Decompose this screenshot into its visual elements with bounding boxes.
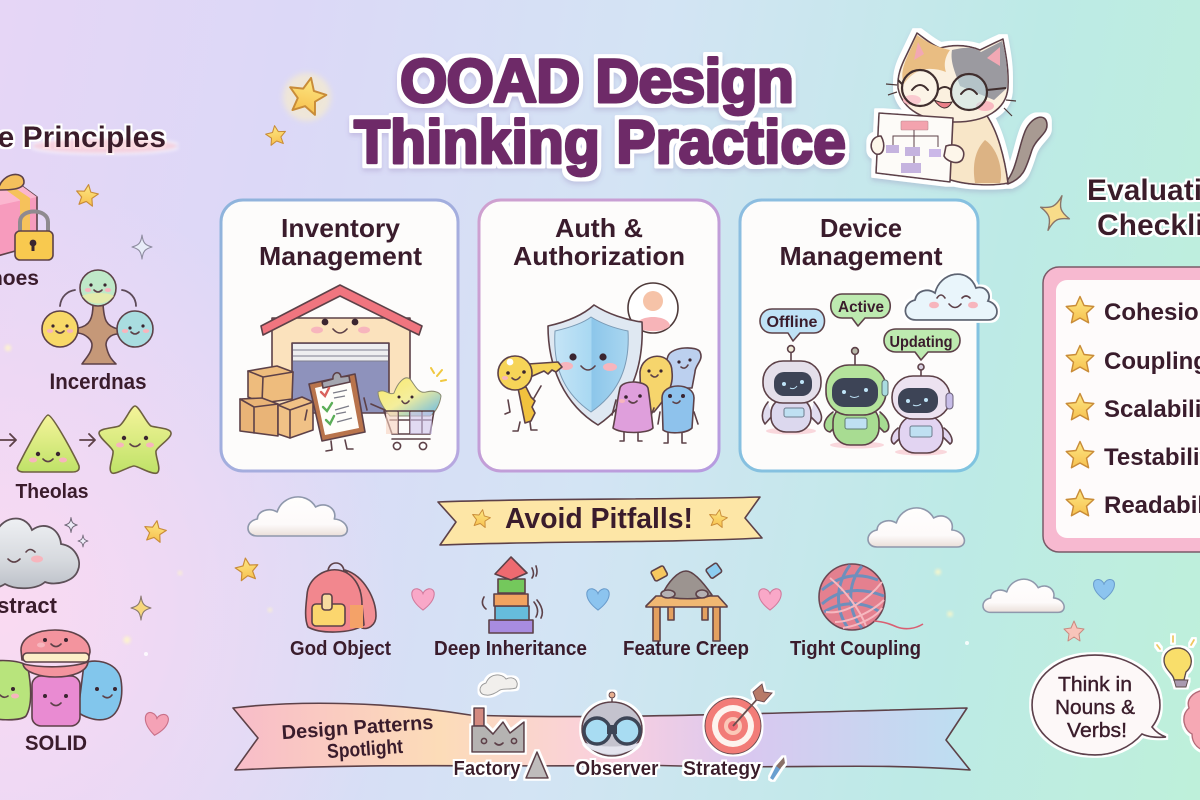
icon: offline robot: [762, 346, 821, 434]
checklist item: coupling: [1066, 346, 1200, 375]
icon: solid macarons: [0, 630, 122, 726]
cat whiskers: [886, 84, 1016, 116]
callout: think in nouns and verbs: [1032, 655, 1166, 755]
pitfall: god object: [290, 563, 391, 660]
icon: title stars: [265, 73, 331, 146]
icon: updating robot: [891, 364, 953, 456]
pitfall: deep inheritance: Deep Inheritance: [434, 638, 587, 660]
icon: pink heart: [759, 589, 781, 610]
cat head: [898, 33, 1008, 122]
icon: sparkle: [1034, 190, 1076, 236]
panel: inventory management: [221, 200, 458, 471]
icon: triangle to star polymorphism: [0, 406, 171, 473]
icon: grey abstraction cloud: [0, 518, 88, 589]
panel: device management: [740, 200, 997, 471]
icon: lower right heart and star: [1064, 579, 1114, 641]
pattern: observer: Observer: [576, 758, 659, 780]
icon: left side decorations: [131, 519, 260, 737]
pitfall: deep inheritance: [434, 557, 587, 660]
callout: offline status: [760, 309, 824, 341]
icon: user avatar: [628, 283, 678, 333]
icon: inheritance tree: [42, 270, 153, 364]
panel: core principles (clipped at left edge): [0, 121, 260, 755]
icon: warehouse with face: [261, 285, 422, 413]
icon: group of user characters: [612, 348, 701, 443]
card heading: Device: [820, 213, 902, 243]
decorative glow dots: [5, 345, 969, 656]
icon: yarn ball: [819, 564, 923, 630]
icon: cat mascot holding diagram: [871, 33, 1047, 185]
pitfall: feature creep: Feature Creep: [623, 638, 749, 660]
icon: key character: [498, 356, 562, 431]
pattern: factory: [454, 675, 548, 780]
icon: wobbly block tower: [482, 557, 542, 633]
icon: gift and padlock: [0, 174, 53, 260]
banner: design patterns spotlight: [233, 675, 970, 780]
icon: light bulb and brain: [1157, 636, 1200, 752]
card heading: Inventory: [281, 213, 401, 243]
banner heading: Spotlight: [326, 736, 404, 763]
icon: backpack: [306, 563, 376, 632]
title: OOAD Design: [400, 47, 794, 115]
callout: think in nouns and verbs: Nouns &: [1055, 696, 1135, 719]
icon: blue heart: [587, 589, 609, 610]
icon: active robot: [824, 348, 889, 448]
title: [354, 47, 846, 176]
callout: offline status: Offline: [766, 314, 818, 331]
pitfall: feature creep: [623, 562, 749, 660]
icon: smiling cloud: [905, 274, 997, 320]
pattern: observer: [576, 692, 659, 780]
card heading: [259, 213, 422, 271]
heading: evaluation checklist: [1087, 174, 1200, 242]
label: incerdnas: Incerdnas: [50, 369, 146, 394]
held diagram sheet: [876, 113, 953, 182]
pitfall: god object: God Object: [290, 638, 391, 660]
callout: active status: Active: [838, 299, 884, 316]
checklist frame: [1043, 267, 1200, 552]
checklist item: testability: [1066, 442, 1200, 471]
card heading: Authorization: [513, 241, 685, 271]
title: Thinking Practice: [354, 108, 846, 176]
card heading: Management: [259, 241, 422, 271]
pitfalls row: [290, 557, 923, 660]
pattern: factory: Factory: [454, 758, 521, 780]
pattern: strategy: Strategy: [683, 758, 762, 780]
card heading: Auth &: [555, 213, 643, 243]
callout: think in nouns and verbs: Think in: [1058, 673, 1132, 696]
panel: evaluation checklist (clipped at right edge): [1034, 174, 1200, 552]
banner heading: Design Patterns: [281, 712, 434, 744]
card heading: Management: [780, 241, 943, 271]
card heading: [513, 213, 685, 271]
icon: cardboard boxes: [240, 366, 313, 438]
icon: star and sparkle: [75, 183, 152, 259]
pattern: strategy: [683, 684, 785, 780]
card heading: [780, 213, 943, 271]
icon: shopping cart with happy blob: [371, 368, 446, 450]
checklist item: scalability: [1066, 394, 1200, 423]
pitfall: tight coupling: [790, 564, 923, 660]
icon: clipboard character: [305, 373, 367, 451]
panel: auth and authorization: [479, 200, 719, 471]
banner: avoid pitfalls: [438, 497, 762, 545]
banner heading: [281, 712, 436, 766]
callout: updating status: [884, 329, 960, 360]
decorative clouds: [248, 497, 1064, 612]
pitfall: tight coupling: Tight Coupling: [790, 638, 921, 660]
callout: active status: [831, 294, 890, 326]
icon: pink heart: [412, 589, 434, 610]
callout: updating status: Updating: [890, 334, 952, 351]
label: polymorphism fragment: Theolas: [16, 481, 88, 503]
cat body: [938, 113, 1008, 185]
checklist item: cohesion: [1066, 296, 1200, 326]
checklist item: readability: [1066, 490, 1200, 519]
icon: shield with face: [548, 305, 642, 425]
icon: overloaded table: [646, 562, 727, 641]
label: solid: SOLID: [25, 732, 87, 755]
banner: avoid pitfalls: Avoid Pitfalls!: [505, 503, 693, 535]
callout: think in nouns and verbs: Verbs!: [1067, 719, 1127, 742]
cat tail: [1005, 117, 1047, 184]
